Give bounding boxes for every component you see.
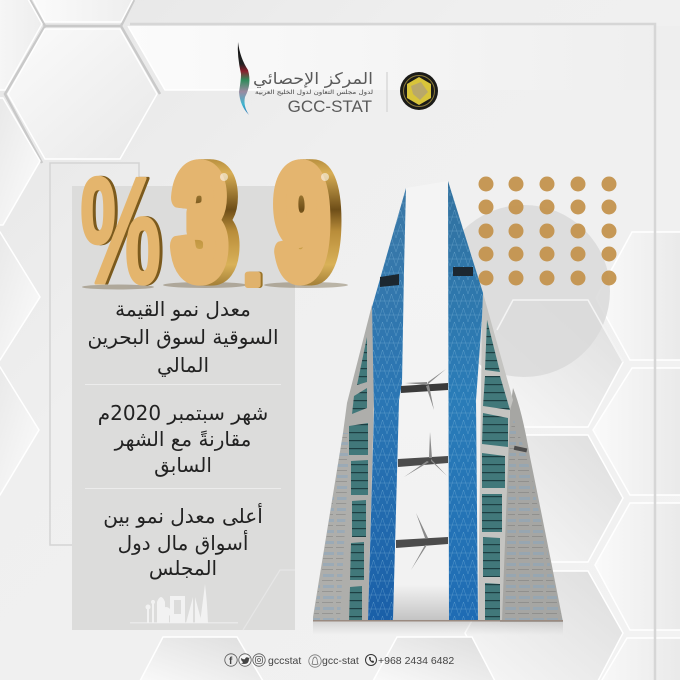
statement 1: السوقية لسوق البحرين xyxy=(87,325,279,349)
percent sign: % xyxy=(80,146,161,316)
icon: instagram xyxy=(253,654,265,666)
illustration: Bahrain World Trade Center towers xyxy=(313,181,563,635)
statement 1: معدل نمو القيمة xyxy=(115,297,251,321)
statement 1: المالي xyxy=(157,353,209,378)
digit 9: 9 xyxy=(281,139,333,306)
panel: left text panel xyxy=(72,186,295,630)
icon: ribbon stripes xyxy=(238,42,249,115)
digit 9: 9 xyxy=(287,139,339,306)
sky bridges xyxy=(396,383,448,548)
wind turbines xyxy=(404,369,447,570)
right outer sail xyxy=(500,388,563,622)
icon: GCC skyline xyxy=(130,584,238,624)
logo text: GCC-STAT xyxy=(288,97,372,116)
logo text: لدول مجلس التعاون لدول الخليج العربية xyxy=(255,89,373,96)
left blue tower xyxy=(368,188,406,620)
decimal point: . xyxy=(243,222,262,300)
handle: gccstat xyxy=(268,655,301,667)
hexagon outline over circle xyxy=(497,300,623,362)
ground shadow xyxy=(313,621,563,635)
statement 3: أعلى معدل نمو بين xyxy=(103,503,263,528)
phone: +968 2434 6482 xyxy=(378,655,454,667)
digit 3: 3 xyxy=(174,139,226,306)
logo text: المركز الإحصائي xyxy=(253,69,373,89)
right sail windows xyxy=(482,320,510,620)
statement 2: السابق xyxy=(154,453,212,477)
big number: %3.9 xyxy=(80,139,348,316)
grey circle xyxy=(438,205,610,377)
icon: facebook: f xyxy=(229,656,233,667)
digit 3: 3 xyxy=(182,139,234,306)
digit 9: 9 xyxy=(284,139,336,306)
highlights xyxy=(220,173,329,181)
digit 3: 3 xyxy=(185,139,237,306)
decorative frame xyxy=(130,24,655,680)
digit 9: 9 xyxy=(278,139,330,306)
digit 3: 3 xyxy=(179,139,231,306)
dot grid xyxy=(478,176,616,286)
logo text xyxy=(253,69,373,116)
handle: gcc-stat xyxy=(322,655,359,667)
shadows xyxy=(82,282,348,290)
statement 2: شهر سبتمبر 2020م xyxy=(98,401,268,425)
digit 9: 9 xyxy=(276,139,328,306)
gray gaps between top-left hexagons xyxy=(5,0,160,163)
footer: social contacts xyxy=(225,654,454,667)
right blue tower xyxy=(448,181,483,620)
icon: GCC emblem xyxy=(400,72,438,110)
percent sign: % xyxy=(83,146,164,316)
gap between towers xyxy=(393,181,449,620)
digit 3: 3 xyxy=(176,139,228,306)
left sail windows xyxy=(349,337,368,621)
icon: facebook xyxy=(225,654,237,667)
icon: snapchat xyxy=(309,655,321,667)
statement 3: المجلس xyxy=(149,556,217,580)
icon: twitter xyxy=(239,654,251,666)
icon: whatsapp xyxy=(366,654,376,666)
logo: GCC-STAT xyxy=(238,42,438,116)
left outer sail xyxy=(313,305,374,621)
tower slots xyxy=(380,274,399,287)
tower base line xyxy=(313,620,563,622)
statement 2: مقارنةً مع الشهر xyxy=(114,427,251,451)
decimal point: . xyxy=(245,222,264,300)
statement 3: أسواق مال دول xyxy=(118,530,248,555)
